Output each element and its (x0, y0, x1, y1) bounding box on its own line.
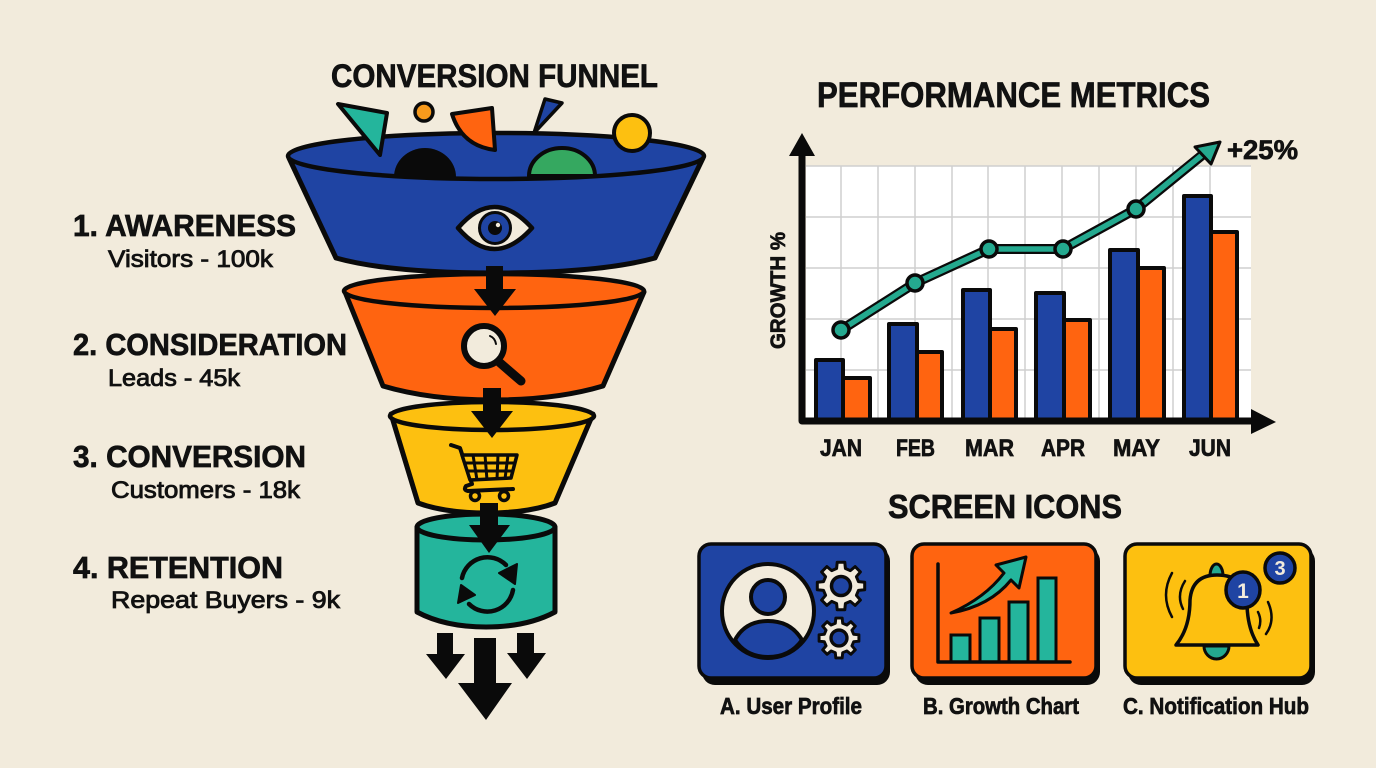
month labels: JAN (820, 435, 862, 462)
icon: gear large (817, 562, 865, 610)
icon: refresh arrows (458, 557, 517, 612)
icon: gear small (819, 618, 859, 658)
panel: growth chart icon card (912, 544, 1100, 685)
icon: shopping cart (451, 445, 517, 500)
arrow: stage 2 to 3 (471, 388, 513, 438)
callout: +25%: +25% (1227, 135, 1298, 165)
panel: notification hub icon card (1125, 544, 1315, 685)
funnel stage 2: consideration (344, 274, 644, 400)
month labels: APR (1041, 435, 1085, 462)
arrow: stage 3 to 4 (469, 503, 510, 553)
icon: user avatar (722, 564, 814, 658)
bars (816, 196, 1237, 420)
icon: bell (1166, 564, 1272, 659)
panel: user profile icon card (699, 544, 890, 685)
label: conversion: Customers - 18k (111, 477, 301, 504)
funnel stage labels (73, 208, 347, 614)
label: consideration: 2. CONSIDERATION (73, 327, 347, 362)
title: conversion funnel: CONVERSION FUNNEL (331, 58, 658, 94)
label: user profile: A. User Profile (720, 693, 862, 719)
label: conversion (73, 439, 306, 504)
arrow: output left (426, 633, 465, 679)
label: retention: 4. RETENTION (73, 550, 283, 585)
label: retention: Repeat Buyers - 9k (111, 587, 341, 614)
funnel stage 4: retention cylinder (417, 514, 555, 627)
chart: monthly growth bars and trend line (767, 133, 1298, 462)
month labels: MAY (1113, 435, 1160, 462)
label: notification hub: C. Notification Hub (1123, 693, 1309, 719)
title: performance metrics: PERFORMANCE METRICS (817, 76, 1210, 115)
label: conversion: 3. CONVERSION (73, 439, 306, 474)
icon: mini bars (951, 578, 1056, 662)
icon: eye (458, 207, 532, 249)
funnel stage 3: conversion (390, 402, 594, 513)
badge: 3: 3 (1274, 558, 1286, 580)
arrow: output right (507, 633, 546, 679)
plot area grid (806, 166, 1251, 420)
label: awareness: 1. AWARENESS (73, 208, 296, 243)
title: screen icons: SCREEN ICONS (888, 488, 1122, 525)
funnel (288, 99, 704, 720)
arrow: output centre (458, 638, 512, 720)
label: retention (73, 550, 341, 614)
month labels: MAR (965, 435, 1014, 462)
label: consideration (73, 327, 347, 392)
month labels: FEB (896, 435, 935, 462)
badge: 1 (1226, 572, 1260, 608)
icon: magnifying glass (464, 326, 521, 381)
funnel mouth shapes (338, 99, 650, 177)
label: growth chart: B. Growth Chart (923, 693, 1079, 719)
y axis label: GROWTH % (767, 232, 790, 349)
label: awareness: Visitors - 100k (108, 246, 274, 273)
month labels (820, 435, 1231, 462)
label: awareness (73, 208, 296, 273)
month labels: JUN (1189, 435, 1231, 462)
badge: 1: 1 (1237, 580, 1249, 603)
badge: 3 (1265, 553, 1295, 583)
axes (789, 133, 1276, 434)
funnel stage 1: awareness (288, 99, 704, 273)
arrow: stage 1 to 2 (474, 266, 516, 316)
label: consideration: Leads - 45k (108, 365, 241, 392)
icon: mini axes (938, 564, 1070, 662)
trend line with arrow (833, 142, 1220, 338)
icon: rising arrow (951, 557, 1026, 613)
